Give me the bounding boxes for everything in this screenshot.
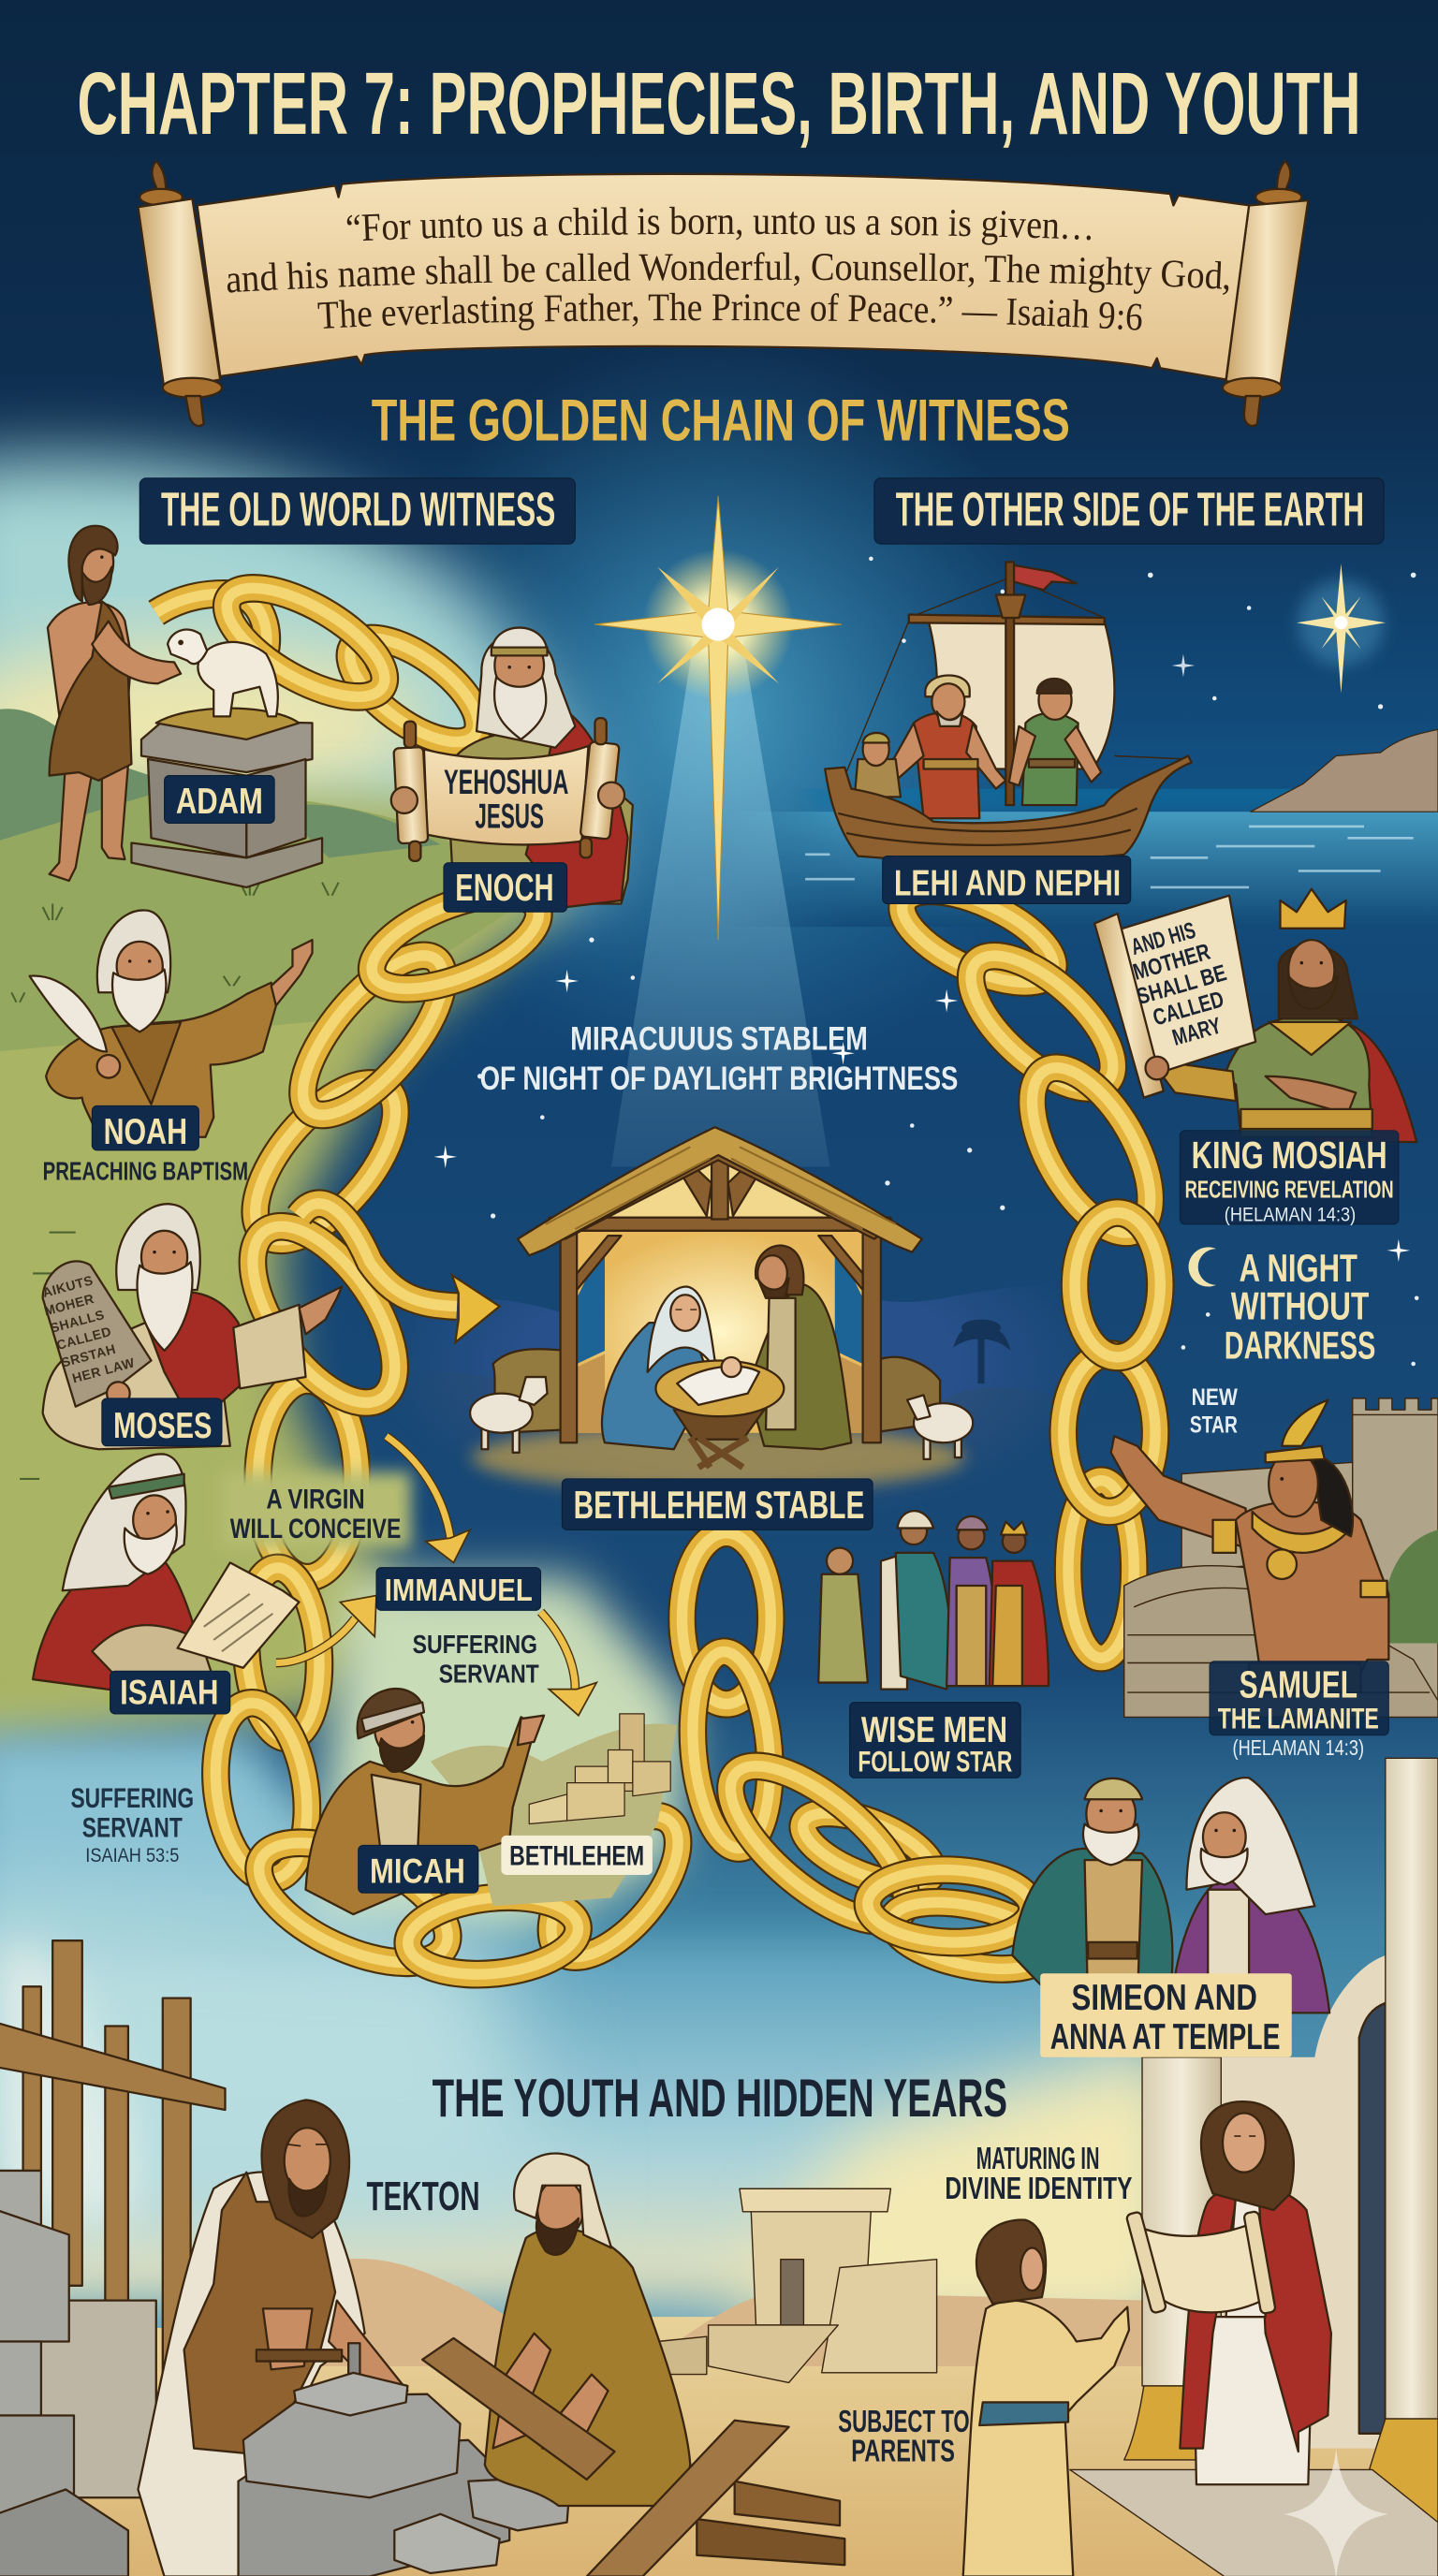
figure: Moses <box>43 1204 342 1449</box>
label: Lehi and Nephi: LEHI AND NEPHI <box>894 864 1121 904</box>
caption: miraculous star: MIRACUUUS STABLEM <box>570 1021 868 1058</box>
decree text: CALLED <box>1151 987 1226 1031</box>
caption backing blur <box>222 1472 411 1548</box>
caption: suffering servant (left): SUFFERING <box>70 1783 194 1814</box>
label: Immanuel: IMMANUEL <box>385 1573 533 1608</box>
caption: suffering servant (middle) <box>413 1630 539 1689</box>
label: wise men: FOLLOW STAR <box>858 1744 1012 1778</box>
thatched roof <box>518 1127 922 1255</box>
arrow: to Bethlehem <box>541 1612 596 1716</box>
label: Moses <box>102 1398 222 1446</box>
right column <box>1359 1758 1438 2523</box>
scroll banner <box>137 159 1309 427</box>
label: Lehi and Nephi <box>883 856 1131 904</box>
label: Enoch <box>444 863 567 912</box>
caption: new star: NEW <box>1192 1385 1239 1411</box>
stable interior <box>577 1231 863 1433</box>
sheep right <box>907 1395 973 1459</box>
golden arrow link to stable <box>299 1204 500 1342</box>
land behind Micah <box>431 1723 677 1906</box>
decree text <box>1121 913 1243 1058</box>
caption: a night without darkness <box>1225 1246 1375 1368</box>
temple steps <box>1070 2469 1438 2576</box>
right roller <box>1223 161 1308 426</box>
left column <box>1124 2057 1221 2460</box>
sail <box>927 622 1114 769</box>
distant hill <box>1251 729 1438 812</box>
held scroll <box>424 746 588 844</box>
label: Bethlehem stable: BETHLEHEM STABLE <box>574 1483 864 1527</box>
decree scroll <box>1094 896 1255 1098</box>
arch doorway <box>1359 2003 1386 2434</box>
figure: Noah <box>30 910 313 1137</box>
background: old world hillside <box>0 460 600 1972</box>
background: pale glow around Micah <box>313 1577 690 1939</box>
palm tree <box>953 1320 1011 1383</box>
watermark sparkle <box>1284 2449 1388 2576</box>
golden chain: left arm <box>156 567 701 1987</box>
temple architecture <box>1070 1758 1438 2576</box>
section label: old world: THE OLD WORLD WITNESS <box>161 483 555 536</box>
label: Moses: MOSES <box>113 1406 212 1446</box>
caption: suffering servant (left) <box>70 1783 194 1866</box>
sheep left <box>470 1377 548 1453</box>
boy <box>818 1548 868 1683</box>
caption: subject to parents: PARENTS <box>851 2435 955 2469</box>
star of Bethlehem <box>594 496 842 940</box>
figure: kneeling man <box>422 2154 690 2506</box>
label: Noah: NOAH <box>104 1112 187 1152</box>
label: wise men: WISE MEN <box>861 1710 1007 1750</box>
heading: youth and hidden years: THE YOUTH AND HIDDEN YEARS <box>433 2069 1007 2129</box>
Joseph <box>748 1245 851 1449</box>
background: star glow <box>373 329 1064 1085</box>
caption: new star: STAR <box>1190 1413 1238 1439</box>
label: wise men <box>850 1703 1020 1778</box>
caption: miraculous star: OF NIGHT OF DAYLIGHT BRIGHTNESS <box>480 1061 958 1097</box>
left roller <box>138 161 222 426</box>
icon: crescent moon <box>1189 1247 1216 1287</box>
caption: subject to parents <box>838 2405 970 2469</box>
label: Samuel: SAMUEL <box>1240 1662 1357 1705</box>
ship <box>825 562 1192 861</box>
town of Bethlehem <box>529 1714 670 1824</box>
caption: tekton: TEKTON <box>366 2174 480 2219</box>
caption: a night without darkness: A NIGHT <box>1240 1246 1357 1290</box>
label: Adam: ADAM <box>176 782 263 822</box>
arrow: scroll to Immanuel <box>276 1596 376 1663</box>
caption: a night without darkness: WITHOUT <box>1231 1284 1369 1328</box>
caption: maturing in divine identity: DIVINE IDENTITY <box>945 2172 1132 2206</box>
rigging <box>846 578 1188 772</box>
tablet text: CALLED <box>55 1324 113 1353</box>
label: King Mosiah: (HELAMAN 14:3) <box>1225 1204 1356 1225</box>
small guiding star <box>1297 564 1386 694</box>
grass tufts <box>11 879 339 1479</box>
sky glow above the sea <box>811 788 1292 812</box>
timber frame <box>549 1142 890 1442</box>
lamb <box>168 630 278 716</box>
figure: Simeon <box>1012 1778 1172 2005</box>
child <box>855 733 901 797</box>
label: Bethlehem: BETHLEHEM <box>509 1840 644 1871</box>
altar <box>131 709 322 887</box>
nativity background hills <box>427 1288 1052 1455</box>
caption: a virgin will conceive: A VIRGIN <box>266 1484 365 1515</box>
tablet text: HER LAW <box>70 1354 137 1385</box>
Lehi <box>884 675 1005 818</box>
label: Simeon and Anna: SIMEON AND <box>1072 1978 1257 2018</box>
first wise man <box>881 1511 950 1690</box>
youth scene: distant hills <box>313 2259 1151 2366</box>
Adam <box>48 526 181 881</box>
figure: boy from behind <box>963 2219 1129 2576</box>
quotation text: “For unto us a child is born, unto us a son is given… <box>346 206 1091 245</box>
youth scene: pale left sky <box>0 1890 542 2202</box>
caption: suffering servant (left): ISAIAH 53:5 <box>85 1845 179 1866</box>
Nephi <box>1009 679 1101 805</box>
parchment <box>198 174 1249 380</box>
figure: carpenter Jesus <box>138 2100 407 2576</box>
decree text: AND HIS <box>1128 918 1198 960</box>
wooden beams <box>587 2421 844 2576</box>
arrow: to Immanuel <box>387 1436 470 1562</box>
label: Isaiah: ISAIAH <box>120 1673 218 1711</box>
tablet text: SHALLS <box>49 1307 106 1336</box>
label: Simeon and Anna <box>1040 1973 1292 2057</box>
stacked stones <box>239 2373 568 2576</box>
caption: miraculous star <box>480 1021 958 1097</box>
golden chain: right arm <box>889 872 1174 1658</box>
temple wall <box>1221 1955 1386 2449</box>
label: Samuel <box>1210 1661 1388 1760</box>
golden chain: centre <box>682 1533 1053 1981</box>
quotation text <box>227 206 1228 330</box>
stone wall <box>0 2171 156 2576</box>
figure: Isaiah <box>33 1454 299 1692</box>
label: Samuel: (HELAMAN 14:3) <box>1233 1735 1364 1760</box>
tablet text: MOHER <box>42 1291 95 1319</box>
figure: Adam with altar <box>48 526 322 887</box>
caption: a virgin will conceive: WILL CONCEIVE <box>230 1514 401 1544</box>
scroll text: Yehoshua Jesus <box>444 763 568 836</box>
decree text: MARY <box>1169 1013 1224 1051</box>
label: Samuel: THE LAMANITE <box>1218 1702 1379 1735</box>
label: Enoch: ENOCH <box>455 866 554 909</box>
quotation text: The everlasting Father, The Prince of Peace.” — Isaiah 9:6 <box>317 292 1142 330</box>
quotation text: and his name shall be called Wonderful, Counsellor, The mighty God, <box>227 252 1228 295</box>
tablet text: SRSTAH <box>60 1341 118 1370</box>
label: Bethlehem <box>501 1836 653 1875</box>
caption: suffering servant (middle): SERVANT <box>439 1660 539 1689</box>
label: King Mosiah <box>1180 1131 1399 1225</box>
caption: maturing in divine identity <box>945 2142 1132 2206</box>
scaffolding <box>0 1940 225 2393</box>
caption: suffering servant (middle): SUFFERING <box>413 1630 537 1659</box>
label: Micah: MICAH <box>370 1852 465 1891</box>
figure: Samuel the Lamanite <box>1111 1400 1388 1692</box>
decree text: MOTHER <box>1130 940 1213 986</box>
figure: Micah <box>306 1689 544 1914</box>
caption: maturing in divine identity: MATURING IN <box>976 2142 1099 2176</box>
youth scene: warm horizon <box>723 2038 1183 2334</box>
figure: King Mosiah <box>1151 889 1416 1142</box>
caption: subject to parents: SUBJECT TO <box>838 2405 970 2439</box>
decree text: SHALL BE <box>1134 960 1229 1010</box>
label: Simeon and Anna: ANNA AT TEMPLE <box>1050 2017 1280 2057</box>
youth scene: clouds <box>0 1939 137 2218</box>
figure: Enoch with scroll <box>391 628 633 907</box>
caption: preaching baptism: PREACHING BAPTISM <box>43 1156 248 1185</box>
straw floor <box>472 1425 964 1490</box>
city wall and towers <box>1124 1398 1438 1717</box>
manger <box>655 1357 784 1468</box>
tablet text: AIKUTS <box>41 1272 95 1300</box>
light beam <box>611 641 829 1166</box>
third wise man <box>990 1522 1049 1686</box>
hull <box>825 756 1192 861</box>
hay bales <box>493 1349 940 1433</box>
caption: new star <box>1190 1385 1239 1439</box>
figures: wise men <box>818 1511 1049 1690</box>
scroll text: Yehoshua Jesus: JESUS <box>475 798 544 836</box>
section label: old world <box>139 478 575 544</box>
Mary <box>602 1287 716 1449</box>
Bethlehem stable <box>518 1127 922 1468</box>
caption: suffering servant (left): SERVANT <box>82 1813 183 1844</box>
caption: a virgin will conceive <box>230 1484 401 1544</box>
distant temple <box>657 2188 937 2382</box>
second wise man <box>946 1516 997 1686</box>
heading: golden chain: THE GOLDEN CHAIN OF WITNESS <box>372 388 1070 453</box>
figure: Anna <box>1170 1778 1329 2012</box>
scroll text: Yehoshua Jesus: YEHOSHUA <box>444 763 568 801</box>
figure: youth Jesus with scroll <box>1126 2101 1331 2484</box>
sea ripples <box>805 827 1414 887</box>
youth scene: sand ground <box>0 2317 1438 2576</box>
star field <box>433 507 1418 1366</box>
sea <box>723 812 1438 927</box>
youth scene: sky <box>0 1939 1151 2301</box>
tablet text <box>37 1267 137 1388</box>
label: Bethlehem stable <box>562 1479 873 1530</box>
